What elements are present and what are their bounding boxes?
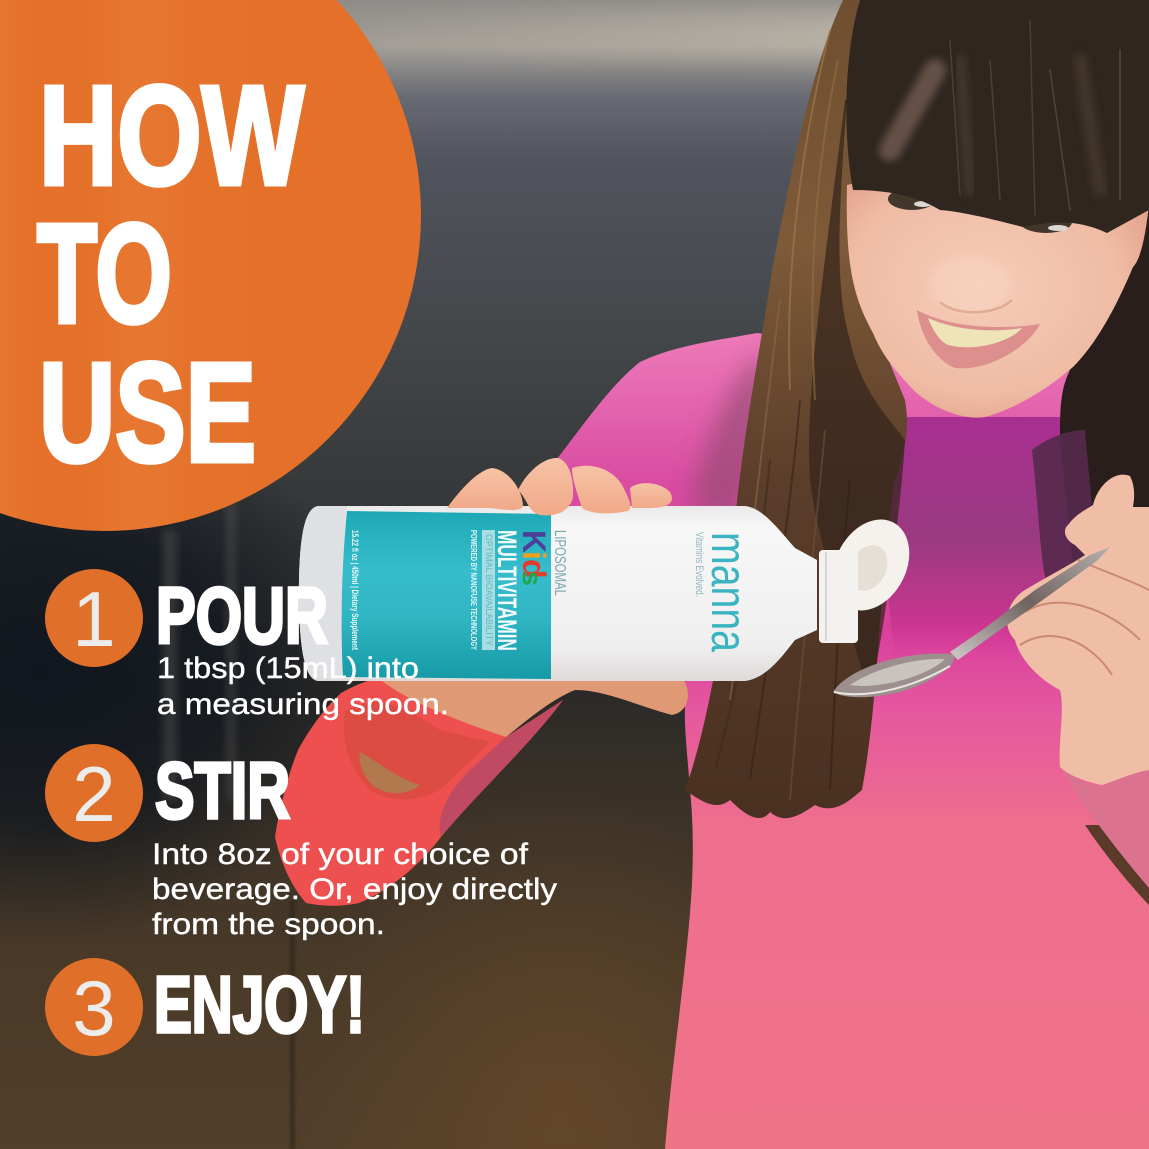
badge 1 [45, 569, 143, 667]
kids logo: K [516, 530, 552, 553]
description 2: Into 8oz of your choice of [152, 838, 529, 871]
girl: hair right [1032, 205, 1149, 905]
label product name [350, 530, 522, 651]
description 2: beverage. Or, enjoy directly [152, 873, 557, 906]
girl: face [847, 180, 1149, 418]
girl: right hand [1007, 475, 1149, 785]
kids logo: s [517, 571, 547, 586]
girl: shirt [556, 333, 1149, 1149]
girl: eyes [888, 188, 1072, 233]
heading: how to use: TO [37, 194, 172, 352]
kids logo [516, 530, 552, 586]
description 2: from the spoon. [152, 908, 385, 941]
kids logo: d [516, 559, 552, 579]
kids logo: i [516, 551, 552, 560]
description 2 [152, 838, 557, 941]
spoon [833, 547, 1110, 697]
hand under bottle [378, 678, 688, 737]
heading: how to use: USE [39, 333, 256, 491]
bottle [299, 506, 924, 681]
title pour: POUR [156, 571, 328, 660]
bottle end shading [299, 506, 347, 677]
girl: nose [930, 257, 1012, 313]
step 2 [45, 744, 557, 941]
label product name: POWERED BY NANOFUSE TECHNOLOGY [469, 530, 478, 650]
label product name: MULTIVITAMIN [492, 530, 522, 651]
description 1: 1 tbsp (15mL) into [157, 652, 419, 685]
girl: bangs [846, 0, 1149, 233]
hand fingers over bottle [447, 458, 672, 515]
heading: how to use: HOW [39, 56, 304, 214]
label product name: 15.22 fl oz | 450ml | Dietary Supplement [350, 530, 360, 650]
tagline: Vitamins Evolved. [693, 532, 705, 597]
girl: smile [917, 310, 1040, 368]
badge 2: 2 [72, 750, 116, 838]
girl: chest shading [880, 417, 1095, 660]
label product name: OPTIMAL BIOAVAILABILITY [484, 534, 494, 646]
hair strands [715, 30, 850, 800]
step 1 [45, 569, 449, 721]
girl: right sleeve [1060, 760, 1149, 888]
orange heading disc [0, 0, 425, 535]
step 3 [45, 958, 365, 1056]
arm sleeve [275, 678, 563, 906]
bangs highlights [890, 20, 1120, 215]
badge 2 [45, 744, 143, 842]
girl: hair left [685, 0, 907, 818]
bottle label [342, 511, 551, 679]
description 1 [157, 652, 449, 721]
badge 3: 3 [72, 964, 116, 1052]
girl: hair tint on shoulder [690, 350, 770, 520]
heading: how to use [37, 56, 304, 491]
bottle cap flip lid [818, 506, 924, 624]
badge 3 [45, 958, 143, 1056]
liposomal text: LIPOSOMAL [551, 530, 568, 596]
bottle body [299, 506, 817, 681]
description 1: a measuring spoon. [157, 688, 449, 721]
title enjoy: ENJOY! [154, 960, 365, 1049]
manna logo: manna [701, 532, 757, 652]
title stir: STIR [155, 746, 290, 835]
badge 1: 1 [72, 575, 116, 663]
bottle cap collar [819, 550, 858, 643]
